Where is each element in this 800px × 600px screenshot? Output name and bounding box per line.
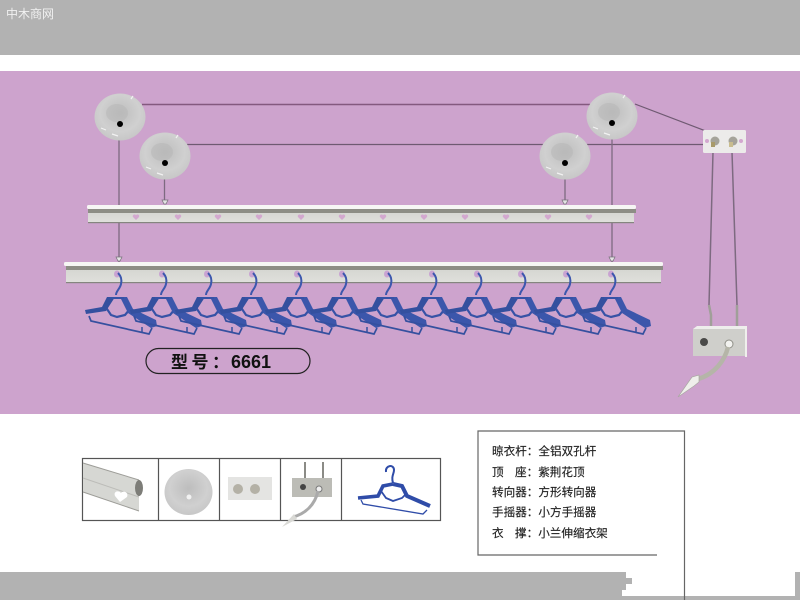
rail heart holes	[133, 214, 592, 220]
spec lines: 顶	[492, 466, 504, 479]
rail clips	[116, 200, 615, 261]
spec lines: 座：紫荆花顶	[515, 465, 585, 479]
spec lines: 手摇器：小方手摇器	[492, 505, 597, 519]
direction bracket	[703, 130, 746, 153]
part: blue hanger	[358, 466, 430, 514]
part: hand crank	[282, 462, 332, 527]
specifications box	[478, 431, 685, 600]
part: ceiling mount	[164, 469, 212, 515]
purple product panel	[0, 71, 800, 414]
row of blue hangers	[85, 270, 651, 334]
lower drying rail	[64, 262, 663, 283]
spec lines: 衣	[492, 526, 504, 540]
spec lines: 转向器：方形转向器	[492, 485, 597, 499]
spec lines: 晾衣杆：全铝双孔杆	[492, 444, 597, 458]
watermark text: 中木商网	[6, 6, 54, 21]
spec lines	[492, 444, 608, 540]
top grey band	[0, 0, 800, 55]
spec lines: 撑：小兰伸缩衣架	[515, 526, 608, 540]
model number badge: 型号：	[171, 353, 232, 372]
parts strip	[82, 458, 440, 527]
part: rail section	[83, 463, 143, 511]
suspension wires	[119, 104, 737, 305]
bottom grey band	[0, 572, 800, 600]
hand crank winder	[678, 305, 747, 397]
part: direction bracket	[228, 477, 272, 500]
ceiling mounts	[94, 92, 638, 180]
model number badge	[146, 348, 310, 374]
model number badge: 6661	[231, 352, 271, 372]
upper drying rail	[87, 205, 636, 223]
